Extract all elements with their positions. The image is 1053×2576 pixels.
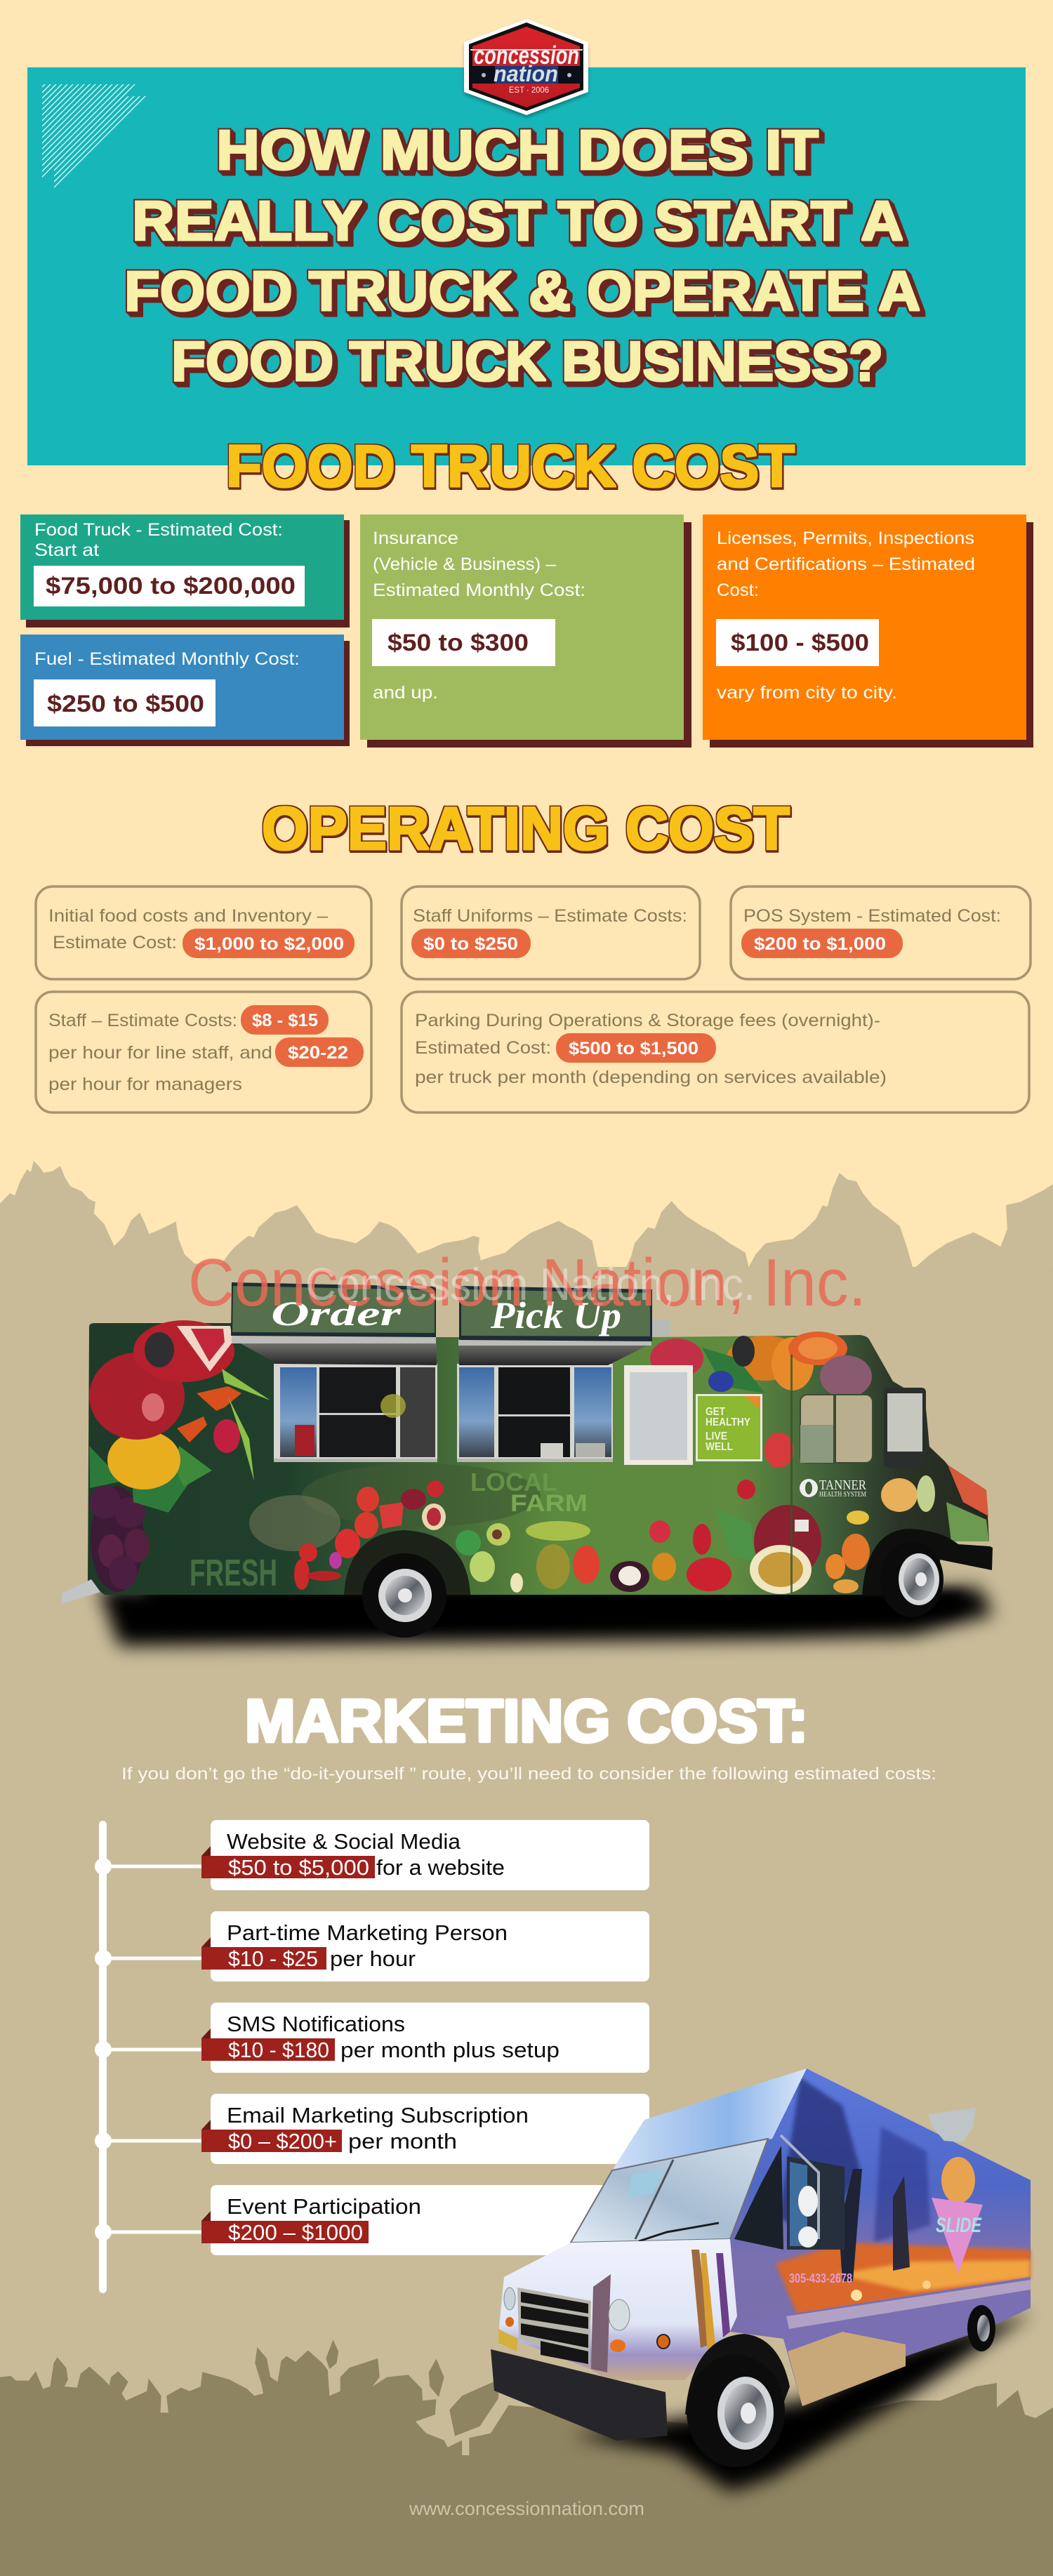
card: staff uniforms: $0 to $250 (423, 934, 518, 954)
truck: get healthy sign (696, 1394, 762, 1461)
title: HOW MUCH DOES IT (216, 119, 819, 181)
card: SMS notifications (201, 2003, 649, 2073)
panel: licenses and permits: Licenses, Permits, Inspections (717, 529, 974, 548)
card: staff wages: Staff – Estimate Costs: (48, 1011, 237, 1030)
title: REALLY COST TO START A (132, 190, 903, 252)
panel: fuel estimated monthly cost: Fuel - Estimated Monthly Cost: (34, 649, 300, 669)
truck: cab windows (800, 1388, 926, 1468)
card: initial food costs: Initial food costs and Inventory – (48, 906, 328, 926)
card: email marketing subscription: $0 – $200+ (228, 2129, 337, 2153)
truck: front wheel well and bumper (862, 1529, 993, 1595)
marketing intro text: If you don’t go the “do-it-yourself ” route, you’ll need to consider the following estimated costs: (121, 1765, 936, 1784)
truck2: side panel (730, 2069, 1031, 2406)
truck2: front wheel (685, 2334, 790, 2467)
card: SMS notifications: $10 - $180 (228, 2038, 329, 2062)
truck: pick up sign: Pick Up (490, 1294, 621, 1336)
card: email marketing subscription: per month (348, 2129, 457, 2153)
card: parking and storage: Estimated Cost: (415, 1038, 551, 1058)
title: FOOD TRUCK BUSINESS? (171, 330, 883, 392)
card: website and social media: $50 to $5,000 (228, 1855, 369, 1880)
illustration: green fruit food truck (62, 1282, 993, 1646)
card: part-time marketing person (201, 1911, 649, 1981)
card: event participation: Event Participation (227, 2194, 421, 2219)
title (124, 119, 920, 392)
truck: Tanner logo: HEALTH SYSTEM (819, 1491, 866, 1499)
panel: insurance: and up. (373, 683, 438, 703)
card: website and social media: for a website (376, 1855, 505, 1880)
card: email marketing subscription (201, 2094, 649, 2164)
panel: food truck estimated cost (20, 514, 350, 628)
truck2: windshield (571, 2139, 768, 2243)
card: email marketing subscription: Email Marketing Subscription (227, 2103, 529, 2127)
card: parking and storage (402, 992, 1029, 1113)
truck2: ice cream logo: SLIDE (936, 2214, 982, 2237)
truck: get healthy sign: HEALTHY (706, 1416, 750, 1428)
panel: insurance: Estimated Monthly Cost: (373, 580, 585, 600)
truck2: roof cap (612, 2069, 807, 2170)
heading: operating cost: OPERATING COST (262, 795, 790, 863)
truck2: grille (517, 2288, 591, 2364)
truck: faded lettering: LOCAL (470, 1468, 557, 1496)
truck2: phone number: 305-433-2678 (789, 2271, 852, 2285)
watermark: grey Concession Nation: Concession Nation, Inc. (305, 1259, 755, 1310)
heading: marketing cost: MARKETING COST: (245, 1688, 808, 1755)
card: SMS notifications: SMS Notifications (227, 2012, 405, 2036)
card: initial food costs: Estimate Cost: (53, 933, 177, 952)
background: tan lower section (0, 1267, 1053, 2460)
card: part-time marketing person: Part-time Marketing Person (227, 1920, 508, 1945)
timeline spine and nodes (95, 1821, 204, 2293)
watermark: red Concession Nation: Concession Nation, Inc. (188, 1245, 866, 1320)
truck: vent (649, 1320, 670, 1336)
card: staff wages: per hour for line staff, and (48, 1043, 272, 1063)
truck: Tanner logo (800, 1478, 867, 1499)
truck: get healthy sign: LIVE (706, 1430, 727, 1442)
truck: rear fruit art (89, 1320, 270, 1592)
truck2: lights (498, 2288, 670, 2352)
tree line silhouette (0, 1161, 1053, 1280)
card: initial food costs: $1,000 to $2,000 (194, 934, 344, 954)
card: SMS notifications: per month plus setup (340, 2038, 559, 2062)
footer ground: solid band (0, 2455, 1053, 2576)
card: parking and storage: Parking During Operations & Storage fees (overnight)- (415, 1011, 880, 1030)
truck: cab fruit art (526, 1332, 989, 1594)
logo: Concession Nation badge (464, 19, 588, 117)
truck: get healthy sign: WELL (706, 1441, 733, 1453)
truck: awnings (232, 1336, 651, 1365)
truck: faded lettering (190, 1468, 588, 1594)
panel: licenses and permits: vary from city to city. (717, 683, 897, 703)
logo: Concession Nation badge: concession (474, 41, 579, 69)
heading: food truck cost: FOOD TRUCK COST (226, 433, 795, 499)
truck: service window right (457, 1364, 613, 1462)
card: staff uniforms (402, 887, 700, 979)
truck: order sign: Order (271, 1294, 402, 1333)
panel: licenses and permits (703, 514, 1033, 748)
card: staff wages: $8 - $15 (252, 1011, 318, 1030)
panel: food truck estimated cost: $75,000 to $200,000 (46, 573, 296, 599)
panel: insurance: (Vehicle & Business) – (373, 555, 556, 574)
panel: licenses and permits: $100 - $500 (731, 630, 869, 656)
truck: menu board (624, 1365, 693, 1465)
card: POS system: POS System - Estimated Cost: (743, 906, 1001, 926)
panel: insurance: $50 to $300 (388, 630, 529, 656)
panel: licenses and permits: and Certifications – Estimated (717, 555, 975, 574)
card: parking and storage: per truck per month (depending on services available) (415, 1068, 887, 1087)
panel: fuel estimated monthly cost: $250 to $500 (47, 691, 204, 717)
truck: front wheel (880, 1541, 943, 1617)
illustration: sunset food truck (491, 2069, 1032, 2492)
teal header panel (27, 67, 1026, 465)
truck: order sign (231, 1282, 436, 1337)
truck: Tanner logo: TANNER (819, 1478, 867, 1493)
footer url: www.concessionnation.com (409, 2498, 644, 2519)
truck2: vent (928, 2108, 976, 2142)
card: staff wages: $20-22 (288, 1043, 348, 1063)
panel: food truck estimated cost: Food Truck - Estimated Cost: (34, 520, 283, 540)
truck: fruit arc art (249, 1463, 541, 1595)
card: staff wages (36, 992, 371, 1113)
card: website and social media (201, 1820, 649, 1890)
truck: faded lettering: FRESH (190, 1552, 277, 1594)
truck: rear wheel (362, 1553, 446, 1638)
background: cream top (0, 0, 1053, 1284)
panel: fuel estimated monthly cost (20, 635, 350, 746)
truck: faded lettering: FARM (510, 1490, 588, 1517)
card: part-time marketing person: $10 - $25 (228, 1946, 318, 1971)
truck2: cab windows (734, 2146, 845, 2250)
card: initial food costs (36, 887, 371, 979)
truck2: hood and front (498, 2239, 737, 2380)
decorative hatched triangle (42, 84, 150, 192)
panel: insurance (360, 514, 691, 748)
card: parking and storage: $500 to $1,500 (569, 1039, 698, 1058)
card: event participation (201, 2185, 649, 2255)
panel: food truck estimated cost: Start at (34, 540, 99, 560)
card: POS system: $200 to $1,000 (754, 934, 886, 954)
truck2: rear wheel (967, 2305, 995, 2351)
truck2: bumper (491, 2349, 668, 2441)
footer ground: leaf silhouettes (0, 2339, 1053, 2458)
card: part-time marketing person: per hour (330, 1946, 416, 1971)
card: staff wages: per hour for managers (48, 1075, 242, 1094)
truck2: ice cream logo (932, 2157, 983, 2273)
logo: Concession Nation badge: nation (494, 61, 558, 86)
card: website and social media: Website & Social Media (227, 1829, 461, 1854)
card: POS system (731, 887, 1031, 979)
card: staff uniforms: Staff Uniforms – Estimate Costs: (413, 906, 687, 926)
truck2: mirrors (781, 2135, 819, 2248)
panel: licenses and permits: Cost: (717, 580, 759, 600)
truck: get healthy sign: GET (706, 1406, 725, 1418)
panel: insurance: Insurance (373, 529, 458, 548)
title: FOOD TRUCK & OPERATE A (124, 260, 920, 322)
truck: service window left (274, 1364, 437, 1462)
truck: pick up sign (459, 1286, 652, 1341)
truck: rear step (62, 1579, 100, 1604)
card: event participation: $200 – $1000 (228, 2220, 363, 2245)
logo: Concession Nation badge: EST · 2006 (509, 85, 549, 95)
